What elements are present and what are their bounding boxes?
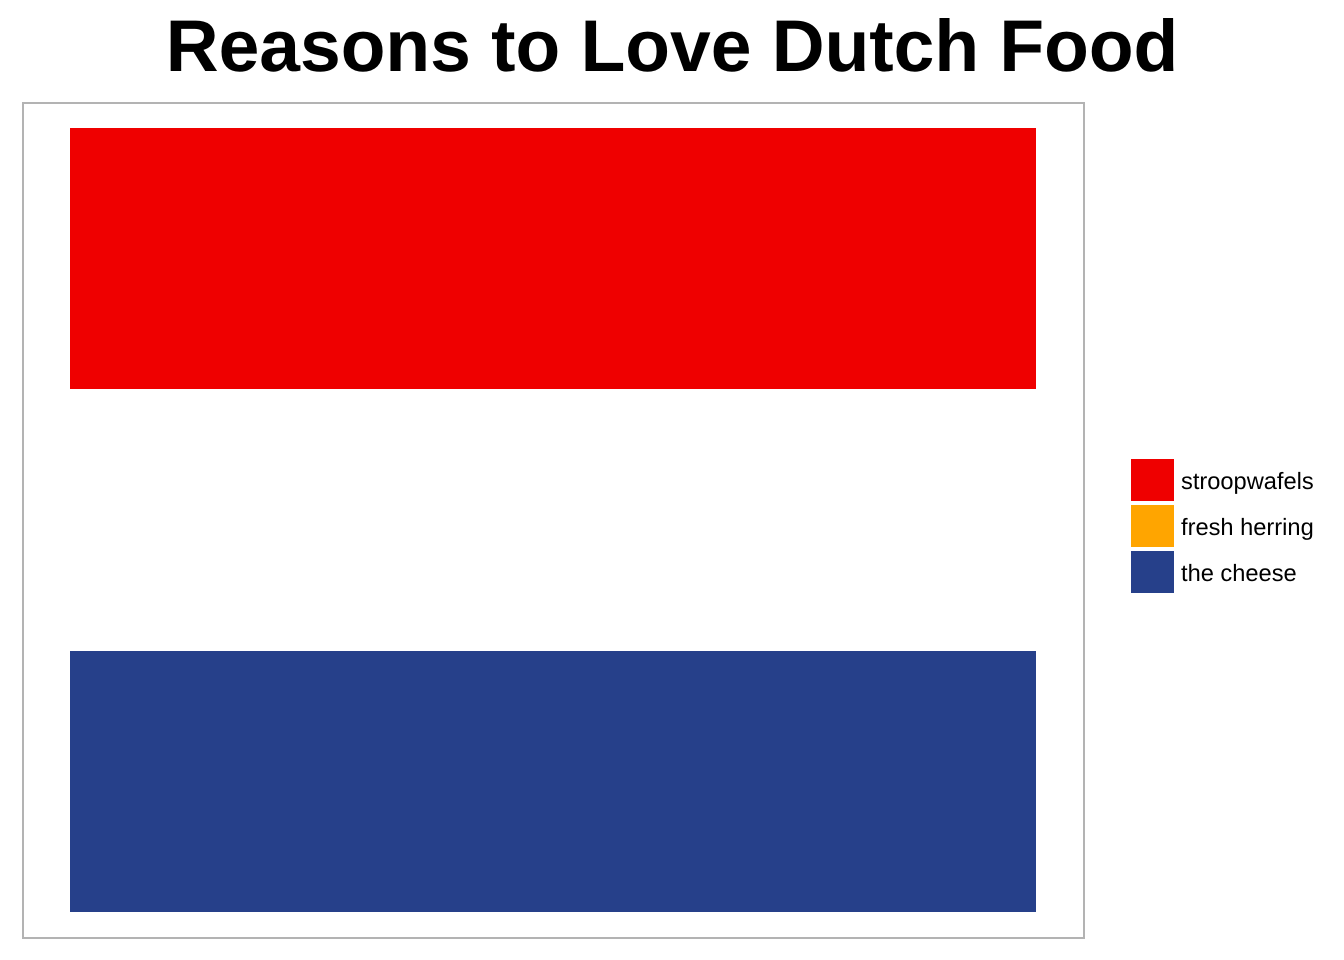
legend item: stroopwafels: stroopwafels <box>1181 469 1314 495</box>
legend <box>1131 459 1314 593</box>
legend item: fresh herring: fresh herring <box>1181 515 1314 541</box>
bar: stroopwafels <box>70 128 1036 389</box>
bar: fresh herring (white) <box>70 389 1036 651</box>
bar: the cheese <box>70 651 1036 912</box>
legend item: fresh herring <box>1131 505 1314 547</box>
legend item: the cheese <box>1131 551 1297 593</box>
legend item: stroopwafels <box>1131 459 1314 501</box>
panel: chart area <box>23 103 1084 938</box>
panel border <box>23 103 1084 938</box>
title: Reasons to Love Dutch Food <box>166 5 1178 87</box>
legend item: the cheese: the cheese <box>1181 561 1297 587</box>
